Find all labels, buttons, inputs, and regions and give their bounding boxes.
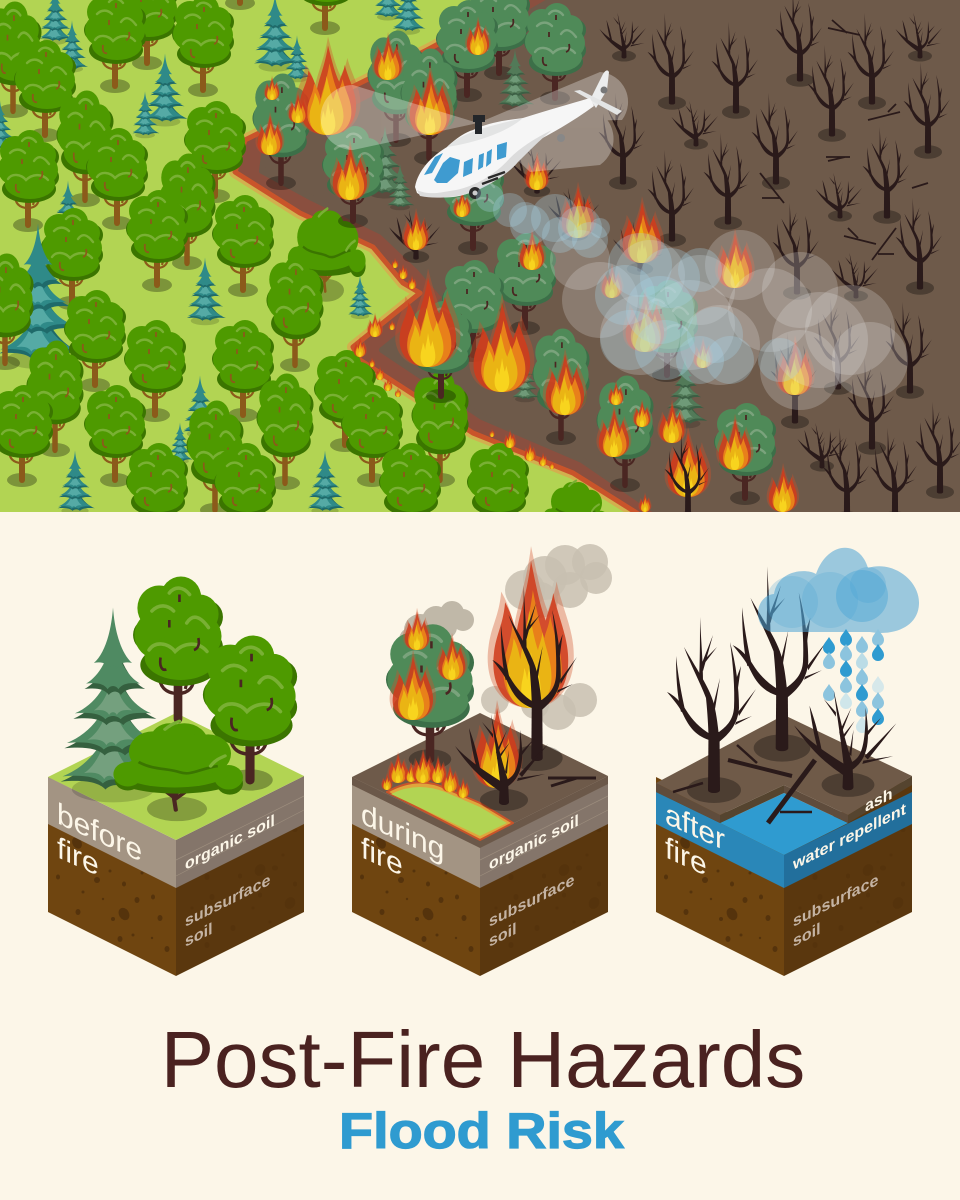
rain cloud [758, 548, 919, 633]
bare tree left [667, 617, 756, 803]
label: subsurface soil: subsurface [185, 870, 270, 931]
burning shrub [455, 714, 548, 811]
shrub flame [471, 700, 522, 788]
rain drops [823, 629, 884, 733]
water drop cloud [476, 184, 908, 410]
round tree [203, 636, 297, 791]
panel: before fire [48, 576, 304, 976]
bare shrub [794, 690, 896, 797]
aerial forest fire scene [0, 0, 960, 549]
pine tree [61, 607, 173, 802]
label: subsurface soil: soil [489, 919, 517, 951]
label: during fire: during [361, 795, 444, 868]
windows [424, 142, 507, 183]
label: during fire: fire [361, 829, 403, 883]
label: before fire: before [57, 795, 142, 869]
green forest trees and pines [0, 0, 608, 549]
tail fin and stabilizer [590, 70, 609, 108]
flames [255, 16, 815, 524]
skids and wheels [482, 172, 505, 184]
soil block [656, 777, 912, 976]
label: subsurface soil: subsurface [489, 870, 574, 931]
label: subsurface soil: subsurface [793, 870, 878, 931]
rotor wash [320, 72, 628, 172]
smoke behind tree [399, 601, 474, 653]
smoke cloud [481, 544, 612, 730]
subtitle: Flood Risk [339, 1104, 625, 1159]
fallen branches [728, 760, 792, 776]
panel: after fire [656, 548, 919, 976]
tall tree [133, 576, 223, 719]
label: ash: ash [865, 784, 893, 816]
label: subsurface soil: soil [185, 919, 213, 951]
title: Post-Fire Hazards [161, 1015, 805, 1104]
panel: during fire [352, 544, 612, 976]
helicopter [320, 70, 628, 199]
fallen branches [548, 778, 596, 786]
body [415, 98, 594, 198]
label: water repellent: water repellent [792, 799, 906, 874]
burning tree [386, 624, 474, 769]
tree flames [390, 608, 467, 720]
burnt top [352, 713, 608, 840]
soil block [352, 777, 608, 976]
organic soil layer [352, 776, 608, 888]
burn scar with fire line [235, 0, 960, 515]
burning bare tree [492, 585, 577, 771]
bare burnt trees [599, 0, 960, 525]
bush tree [113, 721, 243, 821]
water repellent layer [656, 792, 912, 888]
bare tree middle [733, 566, 826, 762]
ground flames [381, 748, 470, 798]
organic soil layer [48, 776, 304, 888]
label: before fire: fire [57, 829, 99, 883]
fallen log [768, 760, 815, 823]
remaining grass patch [387, 782, 513, 840]
label: after fire: fire [665, 829, 707, 883]
label: organic soil: organic soil [185, 811, 275, 874]
large flame [488, 546, 574, 708]
label: after fire: after [665, 795, 725, 857]
label: subsurface soil: soil [793, 919, 821, 951]
grass top [48, 713, 304, 840]
ash layer [656, 715, 912, 823]
soil block [48, 777, 304, 976]
burning dark-green trees and pines [252, 0, 776, 505]
rotor hub [473, 115, 485, 134]
fallen twigs [673, 745, 812, 812]
label: organic soil: organic soil [489, 811, 579, 874]
